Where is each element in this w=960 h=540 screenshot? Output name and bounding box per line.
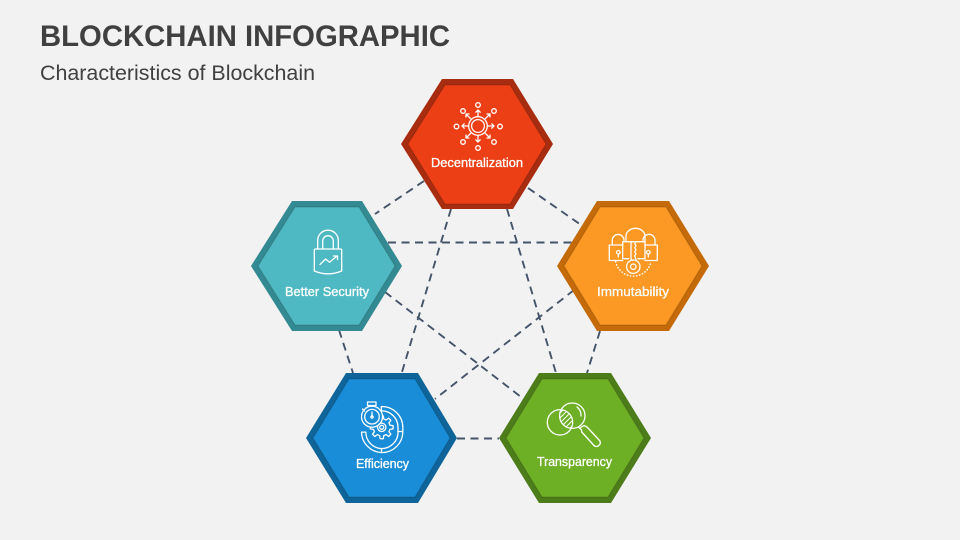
label: Immutability: Immutability xyxy=(597,285,670,299)
infographic canvas xyxy=(41,25,709,503)
label: Efficiency: Efficiency xyxy=(356,457,410,471)
label: Better Security: Better Security xyxy=(285,285,370,299)
icon: key and padlocks xyxy=(609,228,657,276)
dashed connector network xyxy=(339,181,600,438)
panel: Immutability xyxy=(557,201,709,331)
icon: padlock with rising chart xyxy=(314,230,342,274)
icon: decentralized network xyxy=(454,103,502,150)
label: Transparency: Transparency xyxy=(537,455,613,469)
icon: magnifier over overlapping circles xyxy=(547,403,600,447)
panel: Efficiency xyxy=(306,373,457,503)
title: BLOCKCHAIN INFOGRAPHIC xyxy=(40,20,450,53)
subtitle: Characteristics of Blockchain xyxy=(40,62,315,85)
label: Decentralization: Decentralization xyxy=(431,156,523,170)
panel: Better Security xyxy=(251,201,402,331)
panel: Transparency xyxy=(499,373,651,503)
panel: Decentralization xyxy=(401,79,553,209)
icon: stopwatch and gear xyxy=(362,402,403,453)
